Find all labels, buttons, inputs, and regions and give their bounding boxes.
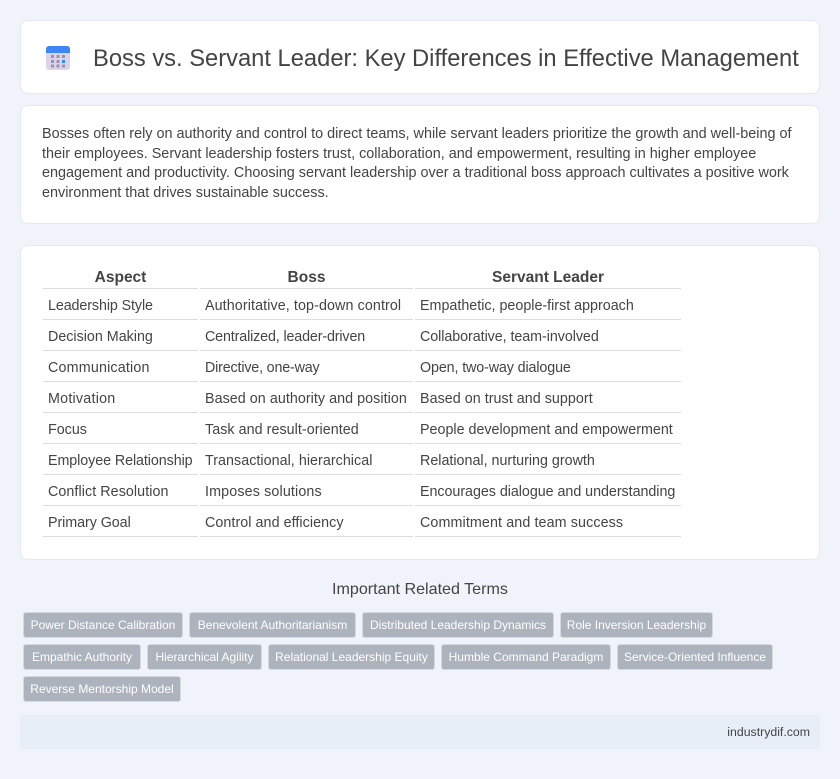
comparison table: Motivation — [48, 391, 115, 407]
related terms heading: Important Related Terms — [332, 580, 508, 598]
intro text — [42, 126, 792, 201]
related terms tags: Hierarchical Agility — [155, 650, 254, 664]
comparison table: Task and result-oriented — [205, 422, 359, 438]
intro text: engagement and productivity. Choosing servant leadership over a traditional boss approach cultivates a positive work — [42, 165, 789, 181]
comparison table: Based on authority and position — [205, 391, 407, 407]
related terms tags: Humble Command Paradigm — [449, 650, 603, 664]
intro text: Bosses often rely on authority and control to direct teams, while servant leaders prioritize the growth and well-being of — [42, 126, 792, 142]
comparison table: Based on trust and support — [420, 391, 593, 407]
comparison table: Centralized, leader-driven — [205, 329, 365, 345]
comparison table: Relational, nurturing growth — [420, 453, 595, 469]
related terms tags: Distributed Leadership Dynamics — [370, 618, 546, 632]
comparison table: Encourages dialogue and understanding — [420, 484, 675, 500]
table panel — [20, 245, 820, 560]
related terms tags: Empathic Authority — [32, 650, 132, 664]
related terms tags — [23, 612, 773, 702]
related terms tags: Benevolent Authoritarianism — [198, 618, 347, 632]
comparison table: Decision Making — [48, 329, 153, 345]
icon: calendar — [46, 46, 70, 70]
comparison table: Transactional, hierarchical — [205, 453, 372, 469]
comparison table: People development and empowerment — [420, 422, 673, 438]
related terms tags: Service-Oriented Influence — [624, 650, 766, 664]
comparison table: Imposes solutions — [205, 484, 322, 500]
comparison table: Open, two-way dialogue — [420, 360, 571, 376]
footer bar — [20, 715, 820, 749]
header panel — [20, 20, 820, 94]
comparison table: Servant Leader — [492, 269, 604, 286]
comparison table: Communication — [48, 360, 150, 376]
related terms tags: Role Inversion Leadership — [567, 618, 706, 632]
comparison table: Primary Goal — [48, 515, 131, 531]
comparison table: Leadership Style — [48, 298, 153, 314]
related terms tags: Reverse Mentorship Model — [30, 682, 174, 696]
intro text: their employees. Servant leadership fosters trust, collaboration, and empowerment, resulting in higher employee — [42, 146, 756, 162]
footer credit: industrydif.com — [727, 725, 810, 739]
comparison table: Control and efficiency — [205, 515, 344, 531]
comparison table: Boss — [288, 269, 325, 286]
intro text: environment that drives sustainable success. — [42, 185, 329, 201]
related terms tags: Power Distance Calibration — [31, 618, 175, 632]
comparison table: Collaborative, team-involved — [420, 329, 599, 345]
comparison table: Commitment and team success — [420, 515, 623, 531]
intro panel — [20, 105, 820, 224]
comparison table: Empathetic, people-first approach — [420, 298, 634, 314]
comparison table: Directive, one-way — [205, 360, 320, 376]
title: Boss vs. Servant Leader: Key Differences in Effective Management — [93, 46, 799, 72]
comparison table: Authoritative, top-down control — [205, 298, 401, 314]
related terms tags: Relational Leadership Equity — [275, 650, 428, 664]
comparison table: Employee Relationship — [48, 453, 193, 469]
comparison table: Focus — [48, 422, 87, 438]
comparison table: Aspect — [95, 269, 146, 286]
comparison table: Conflict Resolution — [48, 484, 169, 500]
